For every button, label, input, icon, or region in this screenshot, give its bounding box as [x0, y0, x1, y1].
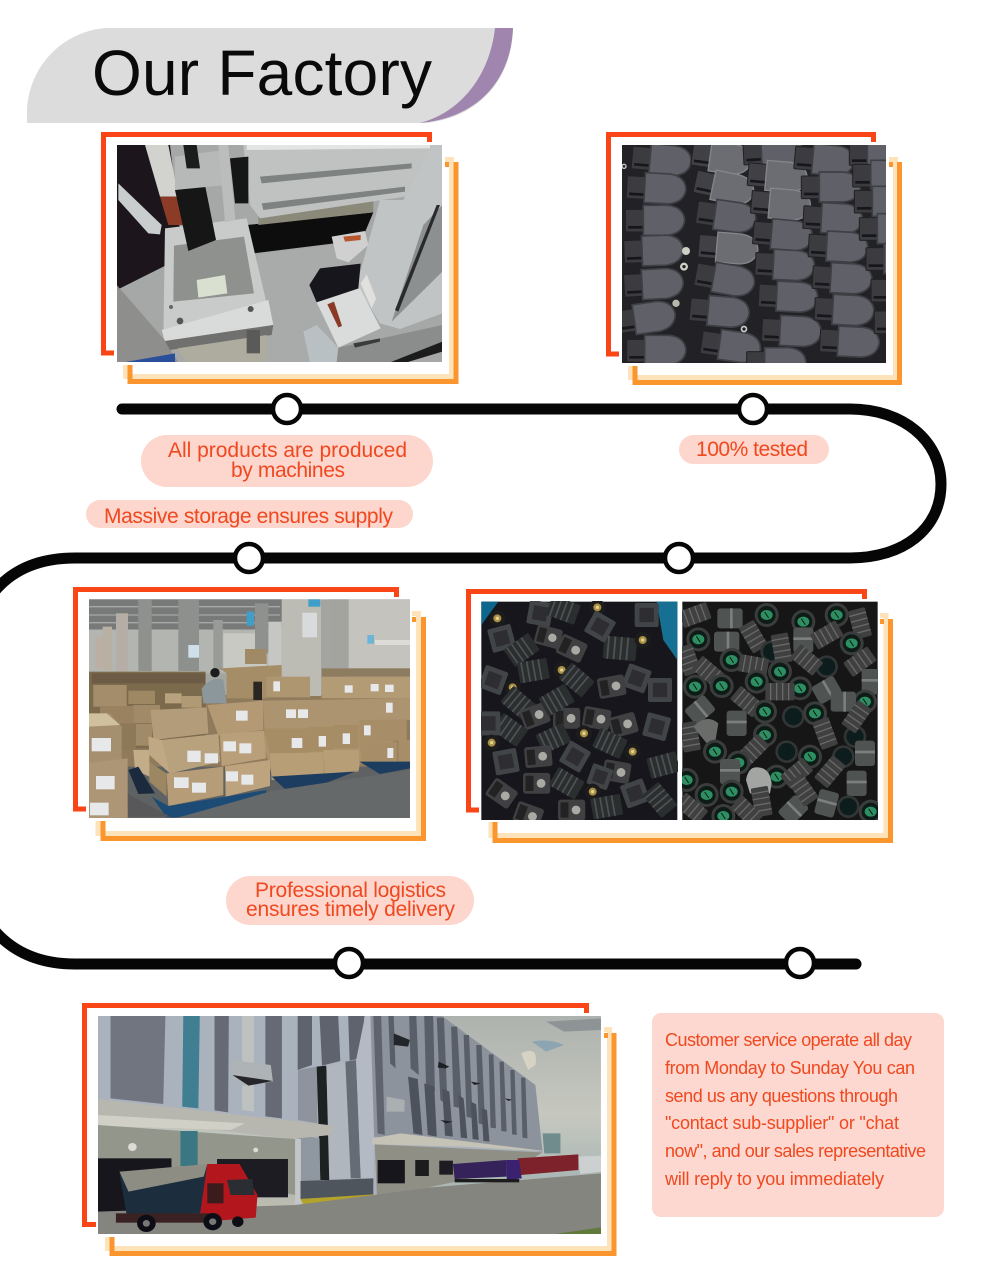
caption: professional logistics [226, 876, 474, 925]
frame [84, 1006, 614, 1254]
panel: logistics building photo [84, 1006, 614, 1254]
photo: warehouse building with trucks [98, 1016, 601, 1234]
node 6 [786, 949, 814, 977]
title: Our Factory [92, 37, 432, 109]
node 5 [335, 949, 363, 977]
callout: customer service: Customer service operate all day [665, 1030, 912, 1050]
photo: sensors with green centres [675, 602, 883, 828]
frame [104, 134, 456, 382]
frame [608, 134, 900, 382]
callout: customer service: "contact sub-supplier" or "chat [665, 1113, 899, 1133]
panel: sensor parts photos [468, 592, 890, 840]
panel: sensors photo [608, 134, 934, 382]
caption: professional logistics: Professional logistics [255, 879, 446, 902]
caption: 100% tested [679, 435, 829, 464]
node 4 [665, 544, 693, 572]
frame [468, 592, 890, 840]
photo: black throttle sensors [476, 595, 681, 829]
node 1 [273, 395, 301, 423]
caption: produced by machines: by machines [231, 459, 345, 482]
callout: customer service [652, 1013, 944, 1217]
photo: automated machine [117, 145, 442, 362]
frame [76, 590, 424, 838]
callout: customer service: now", and our sales representative [665, 1141, 926, 1161]
panel: warehouse photo [76, 590, 424, 838]
callout: customer service: will reply to you immediately [664, 1169, 884, 1189]
banner purple accent [420, 28, 513, 123]
caption: professional logistics: ensures timely delivery [246, 898, 456, 921]
caption: produced by machines [141, 435, 433, 487]
caption: produced by machines: All products are produced [168, 439, 407, 462]
panel: machine photo [104, 134, 456, 382]
node 2 [739, 395, 767, 423]
photo: stacked cartons in warehouse [89, 599, 410, 818]
title banner [27, 28, 513, 123]
banner grey shape [27, 28, 513, 123]
callout: customer service: from Monday to Sunday You can [665, 1058, 915, 1078]
photo: rows of black sensors [622, 145, 886, 363]
callout: customer service: send us any questions through [665, 1086, 898, 1106]
caption: massive storage: Massive storage ensures supply [104, 505, 394, 528]
timeline path [0, 395, 941, 977]
node 3 [235, 544, 263, 572]
caption: 100% tested: 100% tested [696, 438, 808, 461]
